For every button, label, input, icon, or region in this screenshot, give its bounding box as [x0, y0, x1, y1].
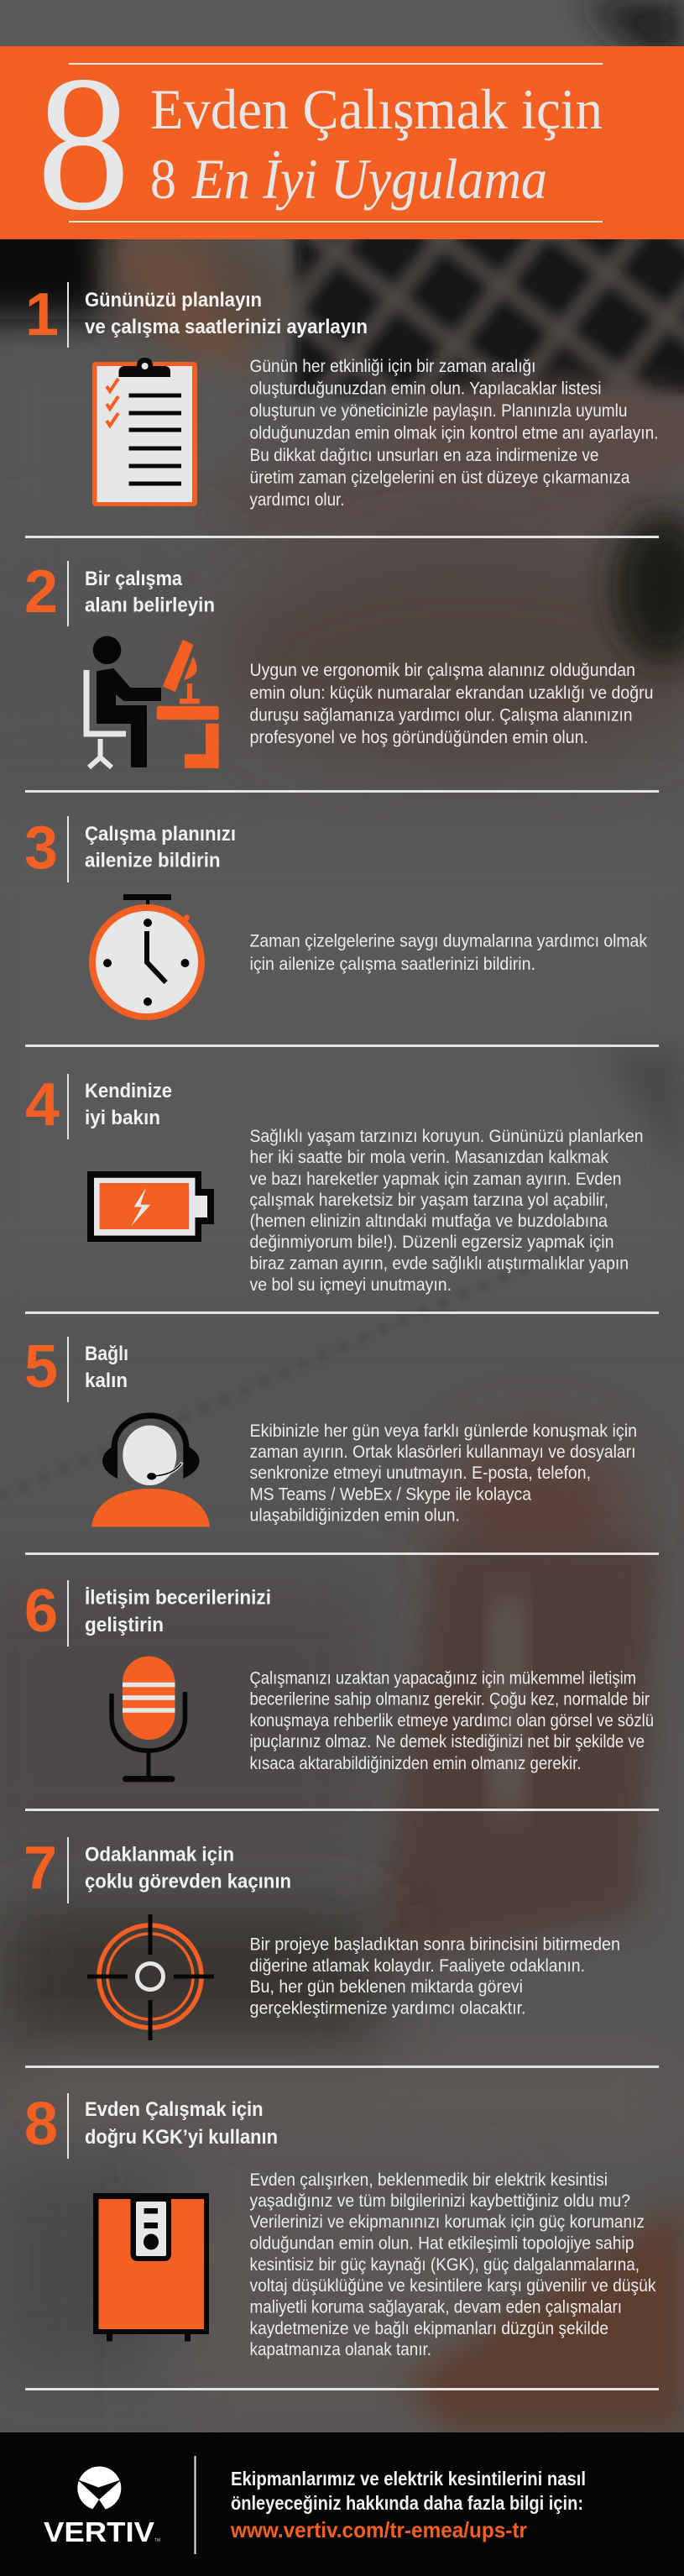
- text 2: emin olun: küçük numaralar ekrandan uzaklığı ve doğru: [250, 683, 653, 703]
- heading 7: çoklu görevden kaçının: [85, 1871, 291, 1893]
- heading 7: [85, 1844, 291, 1893]
- text 4: [250, 1127, 643, 1295]
- number 8: 8: [24, 2091, 58, 2158]
- text 1: üretim zaman çizelgelerini en üst düzeye çıkarmanıza: [250, 469, 630, 487]
- text 2: duruşu sağlamanıza yardımcı olur. Çalışma alanınızın: [250, 706, 633, 725]
- text 4: (hemen elinizin altındaki mutfağa ve buzdolabına: [250, 1212, 608, 1231]
- heading 5: Bağlı: [85, 1343, 128, 1365]
- heading 2: Bir çalışma: [85, 568, 183, 590]
- text 3: Zaman çizelgelerine saygı duymalarına yardımcı olmak: [250, 932, 647, 951]
- section 6: [24, 1578, 654, 1782]
- text 5: zaman ayırın. Ortak klasörleri kullanmayı ve dosyaları: [250, 1442, 636, 1462]
- text 8: yaşadığınız ve tüm bilgilerinizi kaybettiğiniz oldu mu?: [250, 2191, 630, 2211]
- text 5: [250, 1422, 637, 1525]
- title: 8: [150, 147, 176, 211]
- text 1: yardımcı olur.: [250, 490, 344, 510]
- text 8: kapatmanıza olanak tanır.: [250, 2340, 431, 2359]
- text 8: Evden çalışırken, beklenmedik bir elektrik kesintisi: [250, 2170, 608, 2190]
- footer call to action: önleyeceğiniz hakkında daha fazla bilgi için:: [231, 2492, 583, 2514]
- heading 8: [85, 2098, 278, 2149]
- title: [150, 77, 603, 211]
- heading 6: geliştirin: [85, 1614, 164, 1636]
- text 8: kesintisiz bir güç kaynağı (KGK), güç dalgalanmalarına,: [250, 2255, 640, 2275]
- icon: person with headset: [91, 1416, 210, 1526]
- section 8: [24, 2091, 656, 2359]
- footer call to action: Ekipmanlarımız ve elektrik kesintilerini nasıl: [231, 2468, 586, 2490]
- text 3: için ailenize çalışma saatlerinizi bildirin.: [250, 955, 535, 974]
- number 7: 7: [23, 1835, 57, 1902]
- section 7: [23, 1835, 620, 2040]
- text 5: senkronize etmeyi unutmayın. E-posta, telefon,: [250, 1463, 591, 1483]
- text 7: [250, 1935, 620, 2018]
- icon: stopwatch clock: [92, 894, 201, 1017]
- icon: person at desk: [86, 636, 219, 768]
- text 3: [250, 932, 647, 974]
- icon: microphone: [112, 1657, 185, 1782]
- heading 1: ve çalışma saatlerinizi ayarlayın: [85, 316, 368, 338]
- number 2: 2: [24, 558, 58, 626]
- text 6: [250, 1668, 654, 1773]
- heading 5: [85, 1343, 128, 1392]
- heading 3: [85, 823, 236, 872]
- text 4: değinmiyorum bile!). Düzenli egzersiz yapmak için: [250, 1233, 614, 1252]
- heading 4: iyi bakın: [85, 1107, 160, 1129]
- icon: UPS unit: [93, 2193, 209, 2341]
- footer call to action: www.vertiv.com/tr-emea/ups-tr: [230, 2517, 527, 2542]
- text 1: oluşturun ve yöneticinizle paylaşın. Planınızla uyumlu: [250, 401, 628, 421]
- heading 1: [85, 289, 368, 338]
- text 6: kısaca aktarabildiğinizden emin olmanız gerekir.: [250, 1754, 581, 1773]
- text 4: Sağlıklı yaşam tarzınızı koruyun. Gününüzü planlarken: [250, 1127, 643, 1146]
- text 8: maliyetli koruma sağlayarak, devam eden çalışmaları: [250, 2297, 622, 2317]
- heading 6: İletişim becerilerinizi: [85, 1587, 271, 1609]
- heading 2: alanı belirleyin: [85, 594, 215, 616]
- text 5: MS Teams / WebEx / Skype ile kolayca: [250, 1484, 531, 1505]
- heading 8: Evden Çalışmak için: [85, 2098, 264, 2121]
- section 3: [24, 814, 647, 1017]
- heading 7: Odaklanmak için: [85, 1844, 234, 1866]
- section 5: [24, 1333, 637, 1526]
- heading 5: kalın: [85, 1369, 128, 1392]
- heading 4: [85, 1080, 172, 1129]
- text 2: profesyonel ve hoş göründüğünden emin olun.: [250, 728, 588, 747]
- text 7: diğerine atlamak kolaydır. Faaliyete odaklanın.: [250, 1956, 585, 1976]
- heading 3: Çalışma planınızı: [85, 823, 236, 846]
- text 8: kaydetmenize ve bağlı ekipmanları düzgün şekilde: [250, 2319, 608, 2338]
- text 1: oluşturduğunuzdan emin olun. Yapılacaklar listesi: [250, 380, 601, 398]
- number 4: 4: [25, 1071, 60, 1139]
- section 2: [24, 558, 653, 768]
- text 4: her iki saatte bir mola verin. Masanızdan kalkmak: [250, 1148, 608, 1167]
- text 1: [250, 357, 658, 510]
- text 6: Çalışmanızı uzaktan yapacağınız için mükemmel iletişim: [250, 1668, 636, 1688]
- text 8: olduğundan emin olun. Hat etkileşimli topolojiye sahip: [250, 2234, 634, 2254]
- section 4: [25, 1071, 643, 1295]
- title: Evden Çalışmak için: [150, 77, 603, 141]
- section 1: [25, 281, 658, 510]
- text 2: Uygun ve ergonomik bir çalışma alanınız olduğundan: [250, 661, 635, 680]
- text 2: [250, 661, 653, 747]
- header band: [0, 36, 684, 250]
- text 1: Bu dikkat dağıtıcı unsurları en aza indirmenize ve: [250, 446, 599, 465]
- number 3: 3: [24, 814, 58, 882]
- number 6: 6: [24, 1578, 58, 1645]
- footer: [0, 2432, 684, 2576]
- text 8: Verilerinizi ve ekipmanınızı korumak için güç korumanız: [250, 2212, 645, 2232]
- heading 8: doğru KGK’yi kullanın: [85, 2126, 278, 2149]
- number 5: 5: [24, 1333, 58, 1401]
- logo: Vertiv: TM: [154, 2538, 160, 2543]
- text 4: çalışmak hareketsiz bir yaşam tarzına yol açabilir,: [250, 1191, 608, 1210]
- text 5: Ekibinizle her gün veya farklı günlerde konuşmak için: [250, 1422, 637, 1441]
- logo: Vertiv: VERTIV: [44, 2516, 154, 2547]
- heading 2: [85, 568, 215, 616]
- heading 1: Gününüzü planlayın: [85, 289, 262, 312]
- text 4: biraz zaman ayırın, evde sağlıklı atıştırmalıklar yapın: [250, 1254, 629, 1273]
- text 8: voltaj düşüklüğüne ve kesintilere karşı güvenilir ve düşük: [250, 2276, 656, 2296]
- text 5: ulaşabildiğinizden emin olun.: [250, 1505, 460, 1525]
- title: En İyi Uygulama: [191, 147, 547, 211]
- footer call to action: [230, 2468, 586, 2542]
- icon: clipboard: [92, 358, 197, 506]
- text 4: ve bazı hareketler yapmak için zaman ayırın. Evden: [250, 1170, 621, 1189]
- icon: battery: [87, 1171, 214, 1242]
- text 1: Günün her etkinliği için bir zaman aralığı: [250, 357, 535, 376]
- number 1: 1: [25, 281, 59, 348]
- text 6: ipuçlarınız olmaz. Ne demek istediğinizi net bir şekilde ve: [250, 1732, 645, 1751]
- text 4: ve bol su içmeyi unutmayın.: [250, 1275, 452, 1295]
- text 7: gerçekleştirmenize yardımcı olacaktır.: [250, 1998, 525, 2018]
- logo: Vertiv: [44, 2467, 160, 2547]
- icon: target: [87, 1914, 214, 2040]
- big numeral 8: 8: [37, 36, 130, 250]
- heading 6: [85, 1587, 271, 1636]
- heading 3: ailenize bildirin: [85, 850, 221, 872]
- text 7: Bu, her gün beklenen miktarda görevi: [250, 1977, 523, 1997]
- text 7: Bir projeye başladıktan sonra birincisini bitirmeden: [250, 1935, 620, 1955]
- text 8: [250, 2170, 656, 2359]
- heading 4: Kendinize: [85, 1080, 172, 1102]
